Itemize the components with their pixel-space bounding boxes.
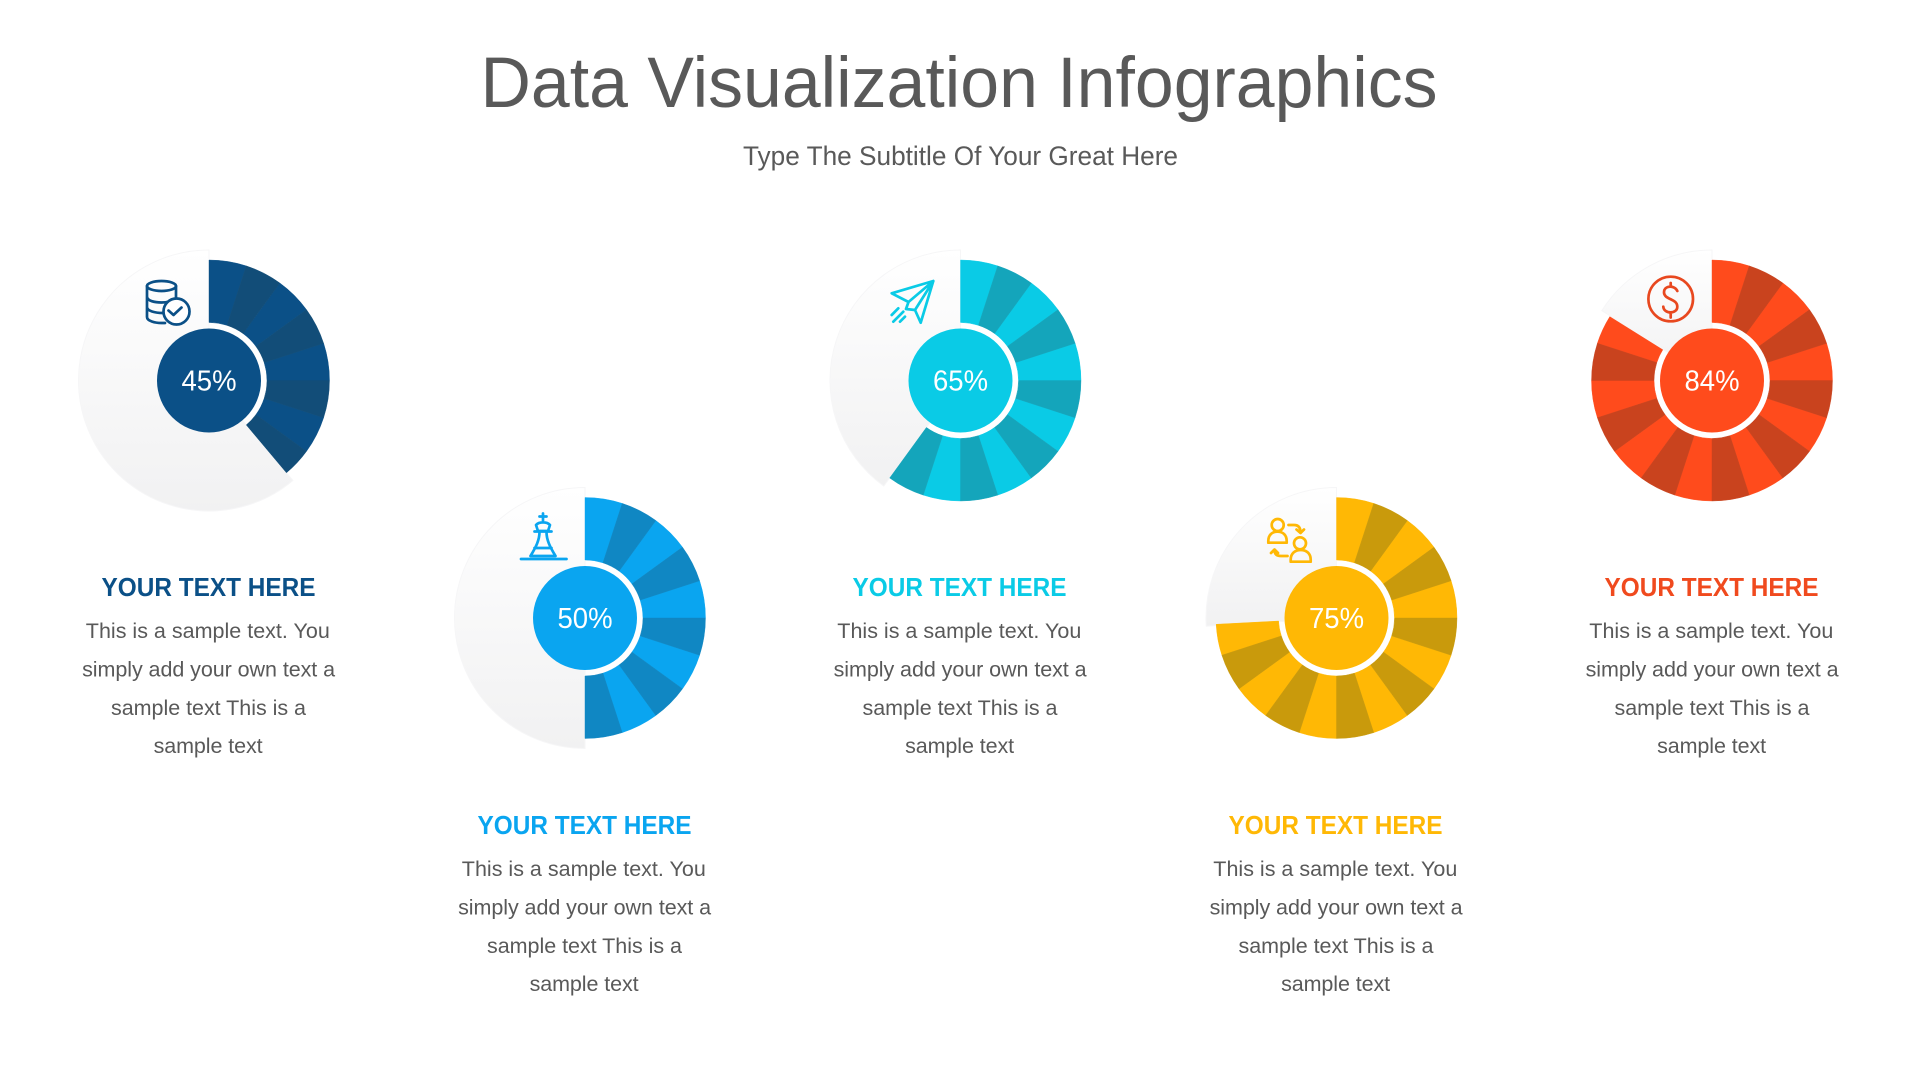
remaining track <box>1602 250 1712 380</box>
donut chart: 75% <box>1206 488 1463 744</box>
heading: YOUR TEXT HERE <box>1604 572 1818 602</box>
icon: database check <box>147 281 190 324</box>
icon: chess king <box>521 514 566 559</box>
body text <box>82 619 335 758</box>
body text: sample text <box>154 734 263 758</box>
icon: dollar coin <box>1648 277 1693 321</box>
light segments <box>923 260 1087 501</box>
body text: simply add your own text a <box>82 658 335 682</box>
percentage: 75% <box>1309 603 1364 635</box>
donut chart: 65% <box>830 250 1087 507</box>
body text: sample text This is a <box>862 696 1058 720</box>
body text: simply add your own text a <box>1586 658 1839 682</box>
body text: sample text <box>905 734 1014 758</box>
body text: sample text This is a <box>1238 934 1434 958</box>
body text: simply add your own text a <box>458 896 711 920</box>
light segments <box>1586 260 1838 501</box>
percentage: 84% <box>1684 366 1740 398</box>
light segments <box>585 498 711 737</box>
dark segments <box>1592 266 1832 507</box>
icon: people exchange <box>1268 519 1311 562</box>
body text: simply add your own text a <box>834 658 1087 682</box>
remaining track <box>1206 488 1336 626</box>
percentage: 45% <box>182 366 236 398</box>
heading: YOUR TEXT HERE <box>852 572 1066 602</box>
percentage: 65% <box>933 366 988 398</box>
body text: sample text This is a <box>487 934 682 958</box>
body text <box>1210 857 1463 996</box>
light segments <box>1212 498 1463 738</box>
panel: 45% card <box>79 250 335 758</box>
body text: sample text This is a <box>1614 696 1810 720</box>
panel: 75% card <box>1206 488 1463 996</box>
center circle <box>157 328 261 432</box>
center circle <box>1660 328 1764 432</box>
body text: This is a sample text. You <box>462 857 706 881</box>
percentage: 50% <box>558 603 612 635</box>
heading: YOUR TEXT HERE <box>1228 810 1442 840</box>
donut chart: 45% <box>79 250 335 511</box>
heading: YOUR TEXT HERE <box>478 810 692 840</box>
body text: sample text <box>1657 734 1766 758</box>
remaining track <box>79 250 293 511</box>
body text: sample text <box>530 972 639 996</box>
center circle <box>533 566 637 670</box>
remaining track <box>830 250 960 486</box>
panel: 50% card <box>454 488 711 996</box>
panel: 65% card <box>830 250 1087 758</box>
donut chart: 84% <box>1586 250 1838 507</box>
dark segments <box>226 266 330 475</box>
dark segments <box>1217 503 1457 744</box>
subtitle: Type The Subtitle Of Your Great Here <box>743 141 1178 171</box>
panel: 84% card <box>1586 250 1839 758</box>
donut chart: 50% <box>454 488 711 748</box>
light segments <box>209 260 335 453</box>
heading: YOUR TEXT HERE <box>102 572 316 602</box>
body text: simply add your own text a <box>1210 896 1463 920</box>
body text: This is a sample text. You <box>1213 857 1457 881</box>
icon: paper plane <box>892 281 933 323</box>
title: Data Visualization Infographics <box>480 44 1438 123</box>
body text: This is a sample text. You <box>86 619 330 643</box>
dark segments <box>888 266 1081 507</box>
dark segments <box>567 503 706 744</box>
center circle <box>908 328 1012 432</box>
body text: sample text This is a <box>111 696 306 720</box>
body text: This is a sample text. You <box>1589 619 1833 643</box>
body text: This is a sample text. You <box>837 619 1081 643</box>
body text <box>1586 619 1839 758</box>
center circle <box>1284 566 1388 670</box>
body text: sample text <box>1281 972 1390 996</box>
body text <box>458 857 711 996</box>
remaining track <box>454 488 585 748</box>
body text <box>834 619 1087 758</box>
